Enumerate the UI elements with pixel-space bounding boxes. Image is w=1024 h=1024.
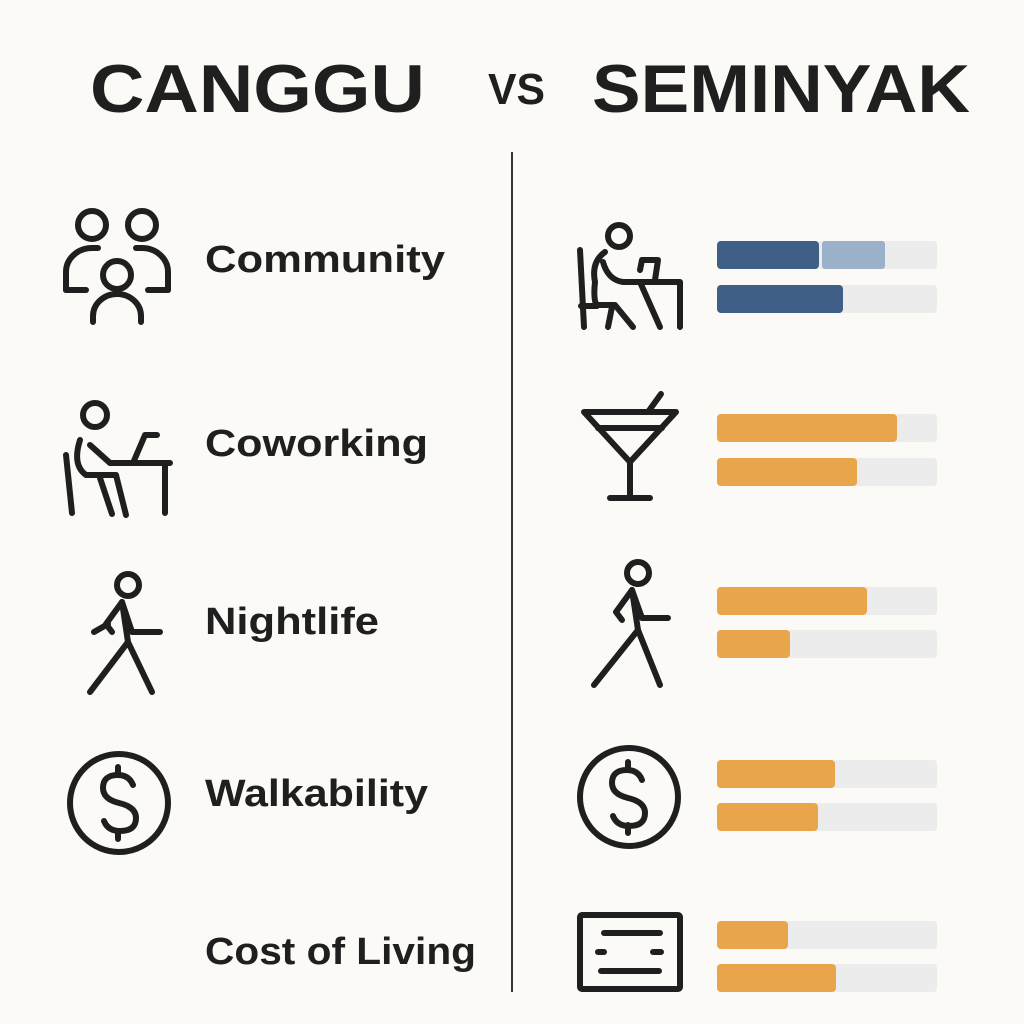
icon: walker — [90, 574, 160, 692]
labels: Coworking — [205, 423, 428, 465]
icon: community — [66, 211, 168, 322]
labels: Community — [205, 239, 445, 281]
labels: Nightlife — [205, 601, 379, 643]
icon: coworking — [66, 403, 170, 515]
title — [90, 51, 970, 127]
title: CANGGU — [90, 51, 425, 127]
icon: dollar — [70, 754, 168, 852]
bar chart — [717, 241, 937, 992]
icon: martini — [584, 394, 676, 498]
title: VS — [488, 65, 545, 114]
icon: desk person — [580, 225, 680, 327]
title: SEMINYAK — [592, 51, 970, 127]
labels: Walkability — [205, 773, 428, 815]
icon: walker — [594, 562, 668, 685]
labels — [205, 239, 476, 973]
icon: card — [580, 915, 680, 989]
right icons — [580, 225, 680, 989]
left column — [66, 211, 170, 852]
labels: Cost of Living — [205, 931, 476, 973]
icon: dollar — [580, 748, 678, 846]
